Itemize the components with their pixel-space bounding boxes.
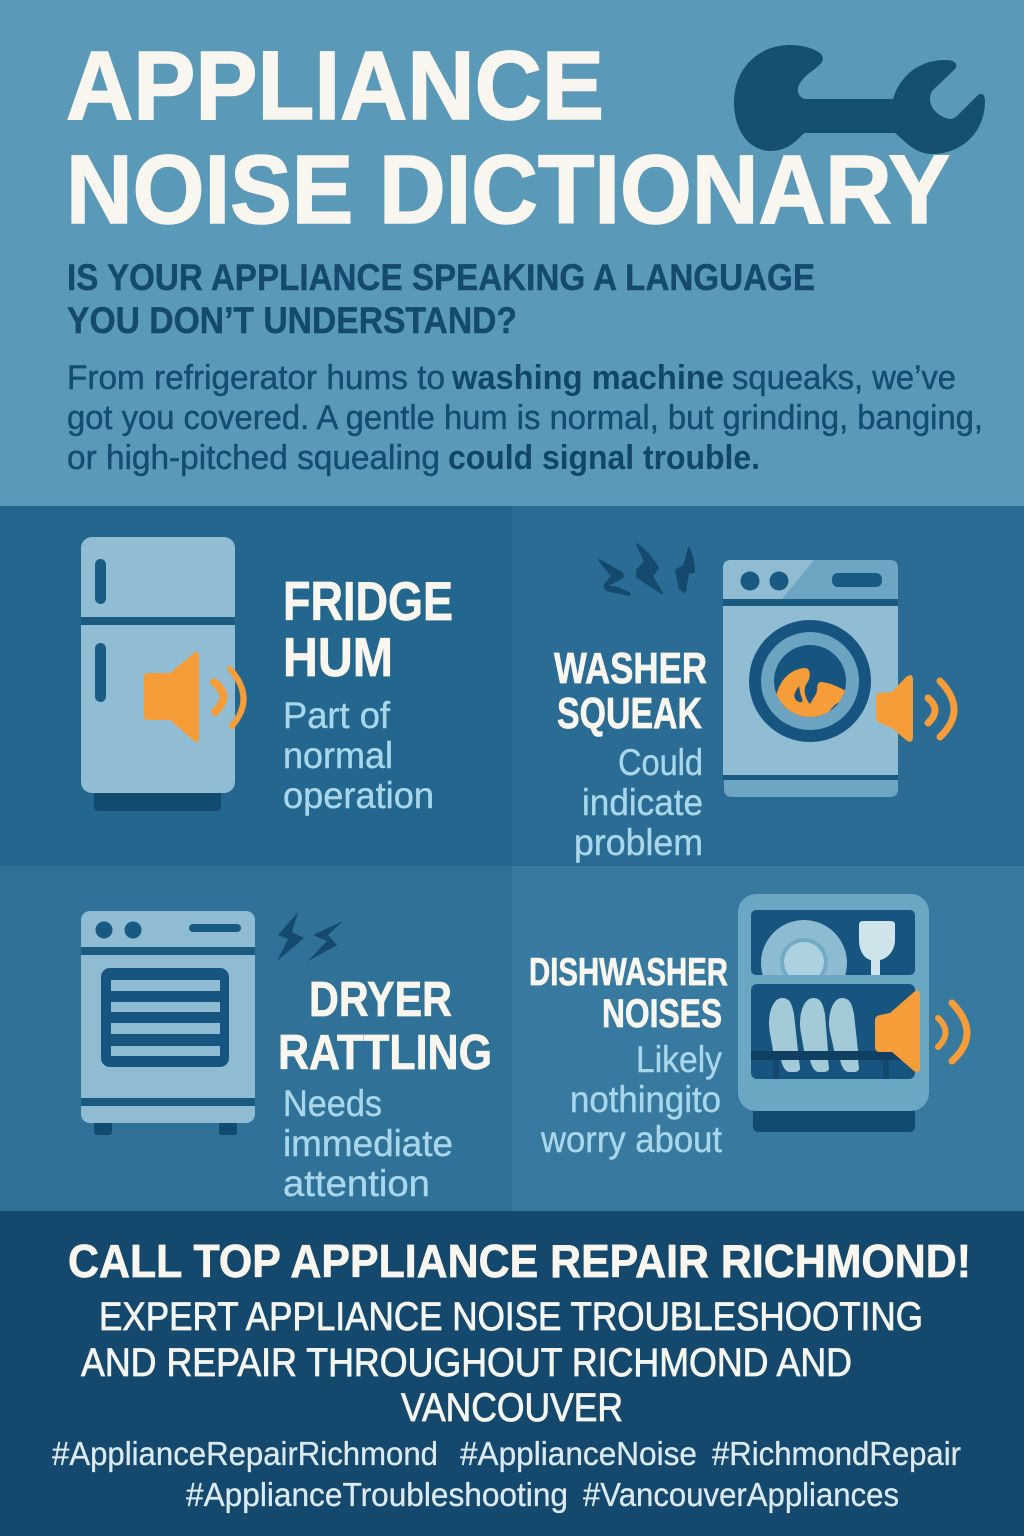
footer panel — [0, 1211, 1024, 1536]
intro paragraph: washing machine — [451, 359, 724, 397]
description: fridge hum: Part of — [283, 695, 391, 736]
heading: dishwasher noises: NOISES — [602, 992, 722, 1036]
description: washer squeak: indicate — [582, 782, 703, 823]
service description — [81, 1295, 923, 1430]
heading: fridge hum — [283, 570, 453, 688]
icon: wrench — [734, 45, 985, 154]
heading: fridge hum: FRIDGE — [283, 570, 453, 632]
heading: dishwasher noises: DISHWASHER — [529, 951, 728, 994]
panel: fridge hum — [0, 506, 512, 866]
hashtags: #VancouverAppliances — [583, 1476, 899, 1513]
heading: dryer rattling — [278, 973, 492, 1080]
description: fridge hum — [283, 695, 434, 816]
description: fridge hum: operation — [283, 775, 434, 816]
heading: dryer rattling: RATTLING — [278, 1026, 492, 1080]
description: washer squeak — [574, 742, 703, 863]
hashtags — [52, 1435, 961, 1513]
description: washer squeak: Could — [618, 742, 703, 783]
hashtags: #ApplianceRepairRichmond — [52, 1435, 438, 1472]
intro paragraph: got you covered. A gentle hum is normal, but grinding, banging, — [67, 399, 983, 437]
title: NOISE DICTIONARY — [66, 135, 950, 244]
call to action: CALL TOP APPLIANCE REPAIR RICHMOND! — [68, 1235, 971, 1287]
description: dryer rattling: immediate — [283, 1123, 453, 1164]
panel: washer squeak — [512, 506, 1024, 866]
icon: fridge with speaker — [81, 537, 244, 811]
icon: squeak bolts — [599, 544, 694, 595]
title — [66, 31, 950, 244]
subtitle — [67, 257, 815, 341]
heading: washer squeak: WASHER — [554, 644, 707, 693]
header panel — [0, 0, 1024, 506]
description: dishwasher noises: Likely — [636, 1039, 722, 1080]
heading: dryer rattling: DRYER — [309, 973, 452, 1027]
description: dryer rattling — [283, 1083, 453, 1204]
description: dryer rattling: Needs — [283, 1083, 382, 1124]
icon: dishwasher with speaker — [738, 894, 967, 1132]
intro paragraph: could signal trouble. — [448, 439, 760, 477]
subtitle: YOU DON’T UNDERSTAND? — [67, 300, 517, 341]
subtitle: IS YOUR APPLIANCE SPEAKING A LANGUAGE — [67, 257, 815, 298]
panel: dishwasher noises — [512, 866, 1024, 1211]
title: APPLIANCE — [66, 31, 604, 140]
hashtags: #ApplianceNoise — [460, 1435, 697, 1472]
hashtags: #ApplianceTroubleshooting — [186, 1476, 568, 1513]
icon: washing machine with speaker — [723, 560, 954, 797]
intro paragraph — [67, 359, 983, 477]
intro paragraph: From refrigerator hums to — [67, 359, 445, 397]
description: fridge hum: normal — [283, 735, 393, 776]
icon: dryer — [81, 911, 255, 1135]
heading: washer squeak — [554, 644, 707, 738]
heading: fridge hum: HUM — [283, 626, 393, 688]
service description: VANCOUVER — [401, 1386, 623, 1430]
intro paragraph: or high-pitched squealing — [67, 439, 440, 477]
service description: EXPERT APPLIANCE NOISE TROUBLESHOOTING — [99, 1295, 923, 1339]
heading: washer squeak: SQUEAK — [557, 689, 702, 738]
service description: AND REPAIR THROUGHOUT RICHMOND AND — [81, 1341, 852, 1385]
panel: dryer rattling — [0, 866, 512, 1211]
description: dishwasher noises: worry about — [540, 1119, 723, 1160]
description: washer squeak: problem — [574, 822, 703, 863]
heading: dishwasher noises — [529, 951, 728, 1036]
description: dishwasher noises: nothingito — [570, 1079, 721, 1120]
intro paragraph: squeaks, we’ve — [732, 359, 956, 397]
icon: rattle bolts — [277, 912, 343, 961]
hashtags: #RichmondRepair — [712, 1435, 961, 1472]
description: dishwasher noises — [540, 1039, 723, 1160]
description: dryer rattling: attention — [283, 1163, 430, 1204]
